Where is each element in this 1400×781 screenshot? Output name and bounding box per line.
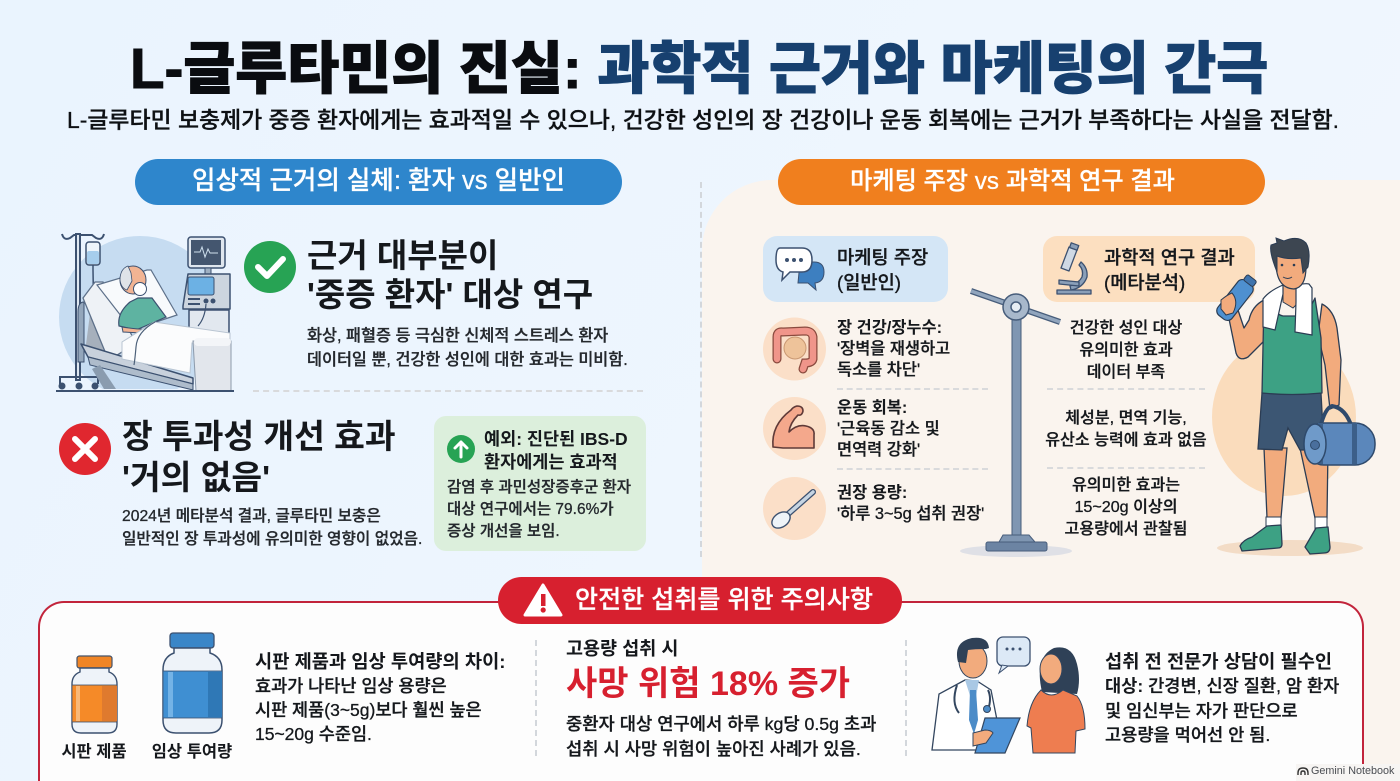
text: marketing claim label xyxy=(837,247,928,294)
panel: right background xyxy=(702,180,1400,781)
text: death risk: 사망 위험 18% 증가 xyxy=(566,665,850,703)
text: result gut: 건강한 성인 대상 xyxy=(1070,319,1182,337)
text: meta analysis: 2024년 메타분석 결과, 글루타민 보충은 xyxy=(122,508,381,525)
text: exception body: 증상 개선을 보임. xyxy=(447,523,560,540)
text: dosage difference: 효과가 나타난 임상 용량은 xyxy=(255,676,447,696)
heading badge: precautions xyxy=(498,577,902,624)
text: science result label: (메타분석) xyxy=(1104,272,1185,293)
icon: balance scale xyxy=(960,288,1072,557)
text: science result label xyxy=(1104,247,1235,294)
text: retail label: 시판 제품 xyxy=(61,743,127,761)
text: exception body: 감염 후 과민성장증후군 환자 xyxy=(447,479,631,496)
icon: orange retail bottle xyxy=(71,655,118,734)
icon: flexed arm xyxy=(763,397,826,460)
text: dosage difference xyxy=(255,651,506,744)
watermark: Gemini Notebook xyxy=(1311,765,1394,777)
title: L-글루타민의 진실: 과학적 근거와 마케팅의 간극 xyxy=(130,37,1268,100)
text: consult professional: 섭취 전 전문가 상담이 필수인 xyxy=(1105,651,1332,672)
text: dosage difference: 시판 제품과 임상 투여량의 차이: xyxy=(255,651,506,672)
text: result dosage xyxy=(1065,476,1187,538)
heading: intestinal permeability: '거의 없음' xyxy=(122,460,270,496)
text: claim recovery xyxy=(837,399,940,459)
text: marketing claim label: (일반인) xyxy=(837,272,901,293)
text: claim gut: 독소를 차단' xyxy=(837,361,920,379)
text: meta analysis: 일반적인 장 투과성에 유의미한 영향이 없었음. xyxy=(122,530,422,548)
text: claim dosage xyxy=(837,484,984,523)
text: consult professional: 대상: 간경변, 신장 질환, 암 환자 xyxy=(1105,676,1339,696)
text: death risk body: 섭취 시 사망 위험이 높아진 사례가 있음. xyxy=(566,739,861,759)
text: consult professional xyxy=(1105,651,1340,745)
icon: spoon xyxy=(763,477,826,540)
text: claim gut: 장 건강/장누수: xyxy=(837,319,942,337)
text: claim recovery: 운동 회복: xyxy=(837,399,907,417)
text: severe patients detail: 화상, 패혈증 등 극심한 신체적 스트레스 환자 xyxy=(307,327,608,345)
text: exception heading: 환자에게는 효과적 xyxy=(484,452,618,472)
icon: green check xyxy=(244,241,296,293)
text: clinical label: 임상 투여량 xyxy=(152,743,232,761)
text: result recovery: 유산소 능력에 효과 없음 xyxy=(1045,431,1207,449)
icon: intestine xyxy=(763,318,826,380)
heading: left pill: 임상적 근거의 실체: 환자 vs 일반인 xyxy=(192,167,565,195)
text: claim dosage: 권장 용량: xyxy=(837,484,907,502)
text: death risk body: 중환자 대상 연구에서 하루 kg당 0.5g 초과 xyxy=(566,714,876,734)
text: consult professional: 및 임신부는 자가 판단으로 xyxy=(1105,701,1298,721)
text: claim dosage: '하루 3~5g 섭취 권장' xyxy=(837,505,984,523)
text: dosage difference: 시판 제품(3~5g)보다 훨씬 높은 xyxy=(255,700,482,720)
panel: IBS-D exception xyxy=(434,416,646,551)
icon: microscope xyxy=(1056,242,1092,295)
icon: speech bubbles xyxy=(775,247,824,292)
watermark xyxy=(1296,764,1400,781)
icon: red cross xyxy=(59,423,111,475)
panel: marketing claim header xyxy=(763,236,948,302)
heading: mostly severe patients: '중증 환자' 대상 연구 xyxy=(307,276,593,313)
text: severe patients detail: 데이터일 뿐, 건강한 성인에 대한 효과는 미비함. xyxy=(307,350,628,368)
text: precautions heading: 안전한 섭취를 위한 주의사항 xyxy=(575,586,873,614)
text: dosage difference: 15~20g 수준임. xyxy=(255,724,372,744)
text: high dose heading: 고용량 섭취 시 xyxy=(566,638,678,659)
text: result recovery: 체성분, 면역 기능, xyxy=(1065,409,1187,427)
text: claim gut: '장벽을 재생하고 xyxy=(837,340,950,358)
text: result dosage: 고용량에서 관찰됨 xyxy=(1065,520,1187,538)
text: claim recovery: '근육동 감소 및 xyxy=(837,420,940,438)
text: claim recovery: 면역력 강화' xyxy=(837,441,920,459)
text: result gut xyxy=(1070,319,1182,381)
icon: patient in hospital bed xyxy=(56,233,234,392)
icon: doctor consulting patient xyxy=(931,636,1086,754)
heading: right pill: 마케팅 주장 vs 과학적 연구 결과 xyxy=(850,168,1175,195)
text: science result label: 과학적 연구 결과 xyxy=(1104,247,1235,268)
text: result dosage: 유의미한 효과는 xyxy=(1072,476,1180,494)
subtitle: L-글루타민 보충제가 중증 환자에게는 효과적일 수 있으나, 건강한 성인의 장 건강이나 운동 회복에는 근거가 부족하다는 사실을 전달함. xyxy=(67,107,1339,133)
panel: science result header xyxy=(1043,236,1255,302)
icon: up arrow xyxy=(447,435,475,463)
heading: right pill xyxy=(778,159,1265,205)
text: consult professional: 고용량을 먹어선 안 됨. xyxy=(1105,725,1270,745)
icon: athlete with bottle and bag xyxy=(1212,237,1376,556)
text: result recovery xyxy=(1045,409,1207,449)
text: exception body xyxy=(447,478,631,540)
heading: mostly severe patients xyxy=(307,237,593,313)
text: exception heading xyxy=(484,429,628,472)
text: exception body: 대상 연구에서는 79.6%가 xyxy=(447,501,614,518)
text: death risk body xyxy=(566,714,876,759)
heading: intestinal permeability: 장 투과성 개선 효과 xyxy=(122,419,396,456)
heading: left pill xyxy=(135,159,622,205)
heading: intestinal permeability xyxy=(122,419,396,496)
text: result gut: 데이터 부족 xyxy=(1087,363,1165,381)
icon: notebook logo xyxy=(1297,767,1309,775)
text: marketing claim label: 마케팅 주장 xyxy=(837,247,928,268)
text: meta analysis xyxy=(122,507,422,548)
text: severe patients detail xyxy=(307,326,628,368)
panel: precautions xyxy=(38,601,1364,780)
text: exception heading: 예외: 진단된 IBS-D xyxy=(484,429,628,449)
text: result gut: 유의미한 효과 xyxy=(1079,341,1173,359)
heading: mostly severe patients: 근거 대부분이 xyxy=(307,237,498,274)
icon: blue clinical bottle xyxy=(162,632,223,734)
icon: warning triangle xyxy=(524,583,563,616)
text: result dosage: 15~20g 이상의 xyxy=(1074,498,1178,516)
text: claim gut xyxy=(837,319,950,379)
